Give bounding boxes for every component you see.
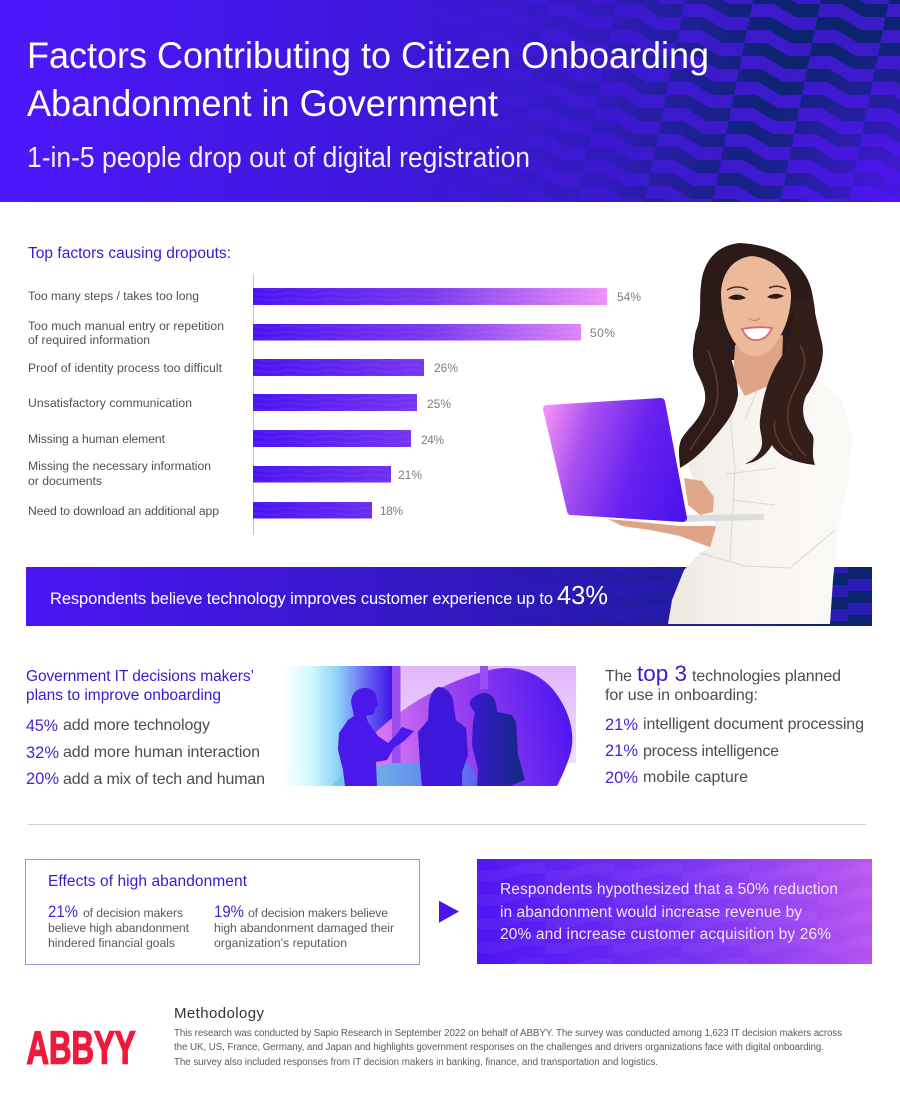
heading: Effects of high abandonment: [48, 873, 248, 890]
face: [721, 256, 791, 356]
hair back: [695, 243, 815, 360]
hair left strand: [679, 318, 738, 468]
title: [27, 34, 709, 124]
heading: technologies planned: [692, 668, 841, 685]
laptop base: [684, 514, 764, 522]
bar: unsatisfactory communication: 25%: [427, 397, 451, 411]
methodology: Methodology: [174, 1005, 264, 1022]
heading: top 3: [637, 661, 687, 686]
man silhouette: [338, 688, 414, 786]
heading: for use in onboarding:: [605, 687, 758, 704]
panel: effects of high abandonment: [26, 860, 420, 964]
subtitle: 1-in-5 people drop out of digital registration: [27, 142, 530, 174]
stat: financial goals: [48, 902, 190, 950]
methodology: This research was conducted by Sapio Research in September 2022 on behalf of ABBYY. The survey was conducted among 1,623 IT decision makers across: [174, 1028, 842, 1039]
bar: manual entry: 50%: [590, 326, 615, 340]
bar: too many steps: Too many steps / takes too long: [28, 289, 199, 303]
callout: hypothesized revenue increase: in abandonment would increase revenue by: [500, 904, 802, 921]
callout banner: technology improves customer experience: [26, 567, 872, 626]
stat: add more technology: 45%: [26, 716, 58, 735]
typing hand: [684, 478, 714, 515]
bar: manual entry: of required information: [28, 333, 150, 347]
bar: too many steps: [28, 288, 641, 305]
hair right strand: [745, 298, 823, 465]
stat: add a mix: 20%: [26, 769, 59, 788]
stat: financial goals: of decision makers: [83, 906, 183, 920]
bar: proof of identity: [28, 359, 458, 376]
methodology: The survey also included responses from IT decision makers in banking, finance, and transportation and logistics.: [174, 1057, 658, 1068]
methodology: [174, 1005, 842, 1068]
bar: human element: 24%: [421, 433, 444, 447]
pillars: [392, 666, 488, 763]
stat: intelligent document processing: intelligent document processing: [643, 716, 864, 733]
floor: [332, 762, 482, 786]
stat: add more human interaction: add more human interaction: [63, 744, 260, 761]
stat: add more technology: add more technology: [63, 717, 210, 734]
callout banner: technology improves customer experience: 43%: [557, 580, 608, 610]
title: Factors Contributing to Citizen Onboarding: [27, 34, 709, 76]
callout: hypothesized revenue increase: Respondents hypothesized that a 50% reduction: [500, 881, 838, 898]
purple blob: [370, 668, 572, 786]
callout banner: technology improves customer experience: Respondents believe technology improves customer experience up to: [50, 590, 553, 608]
stat: process intelligence: 21%: [605, 741, 638, 760]
stat: mobile capture: [605, 768, 748, 787]
bar: missing information: Missing the necessary information: [28, 459, 211, 473]
bar: additional app: [28, 502, 403, 518]
stat: reputation: organization's reputation: [214, 936, 347, 950]
heading: [26, 668, 254, 704]
chart heading: Top factors causing dropouts:: [28, 245, 231, 262]
bar: missing information: or documents: [28, 474, 102, 488]
callout: hypothesized revenue increase: [477, 859, 872, 964]
stat: reputation: [214, 902, 394, 950]
third person silhouette: [470, 693, 525, 786]
stat: financial goals: believe high abandonment: [48, 921, 190, 935]
stat: reputation: 19%: [214, 902, 244, 921]
heading: The: [605, 668, 632, 685]
heading: Government IT decisions makers’: [26, 668, 254, 685]
bar: unsatisfactory communication: [28, 394, 451, 411]
stat: mobile capture: mobile capture: [643, 769, 748, 786]
bar: proof of identity: Proof of identity process too difficult: [28, 361, 223, 375]
bar: manual entry: [28, 319, 615, 347]
bar: human element: Missing a human element: [28, 432, 166, 446]
bar: too many steps: 54%: [617, 290, 641, 304]
methodology: the UK, US, France, Germany, and Japan and highlights government responses on the challenges and drivers organizations face with digital onboarding.: [174, 1042, 824, 1053]
bar: proof of identity: 26%: [434, 361, 458, 375]
stat: add more human interaction: 32%: [26, 743, 59, 762]
stat: mobile capture: 20%: [605, 768, 638, 787]
bar: missing information: [28, 459, 422, 488]
heading: [605, 661, 841, 704]
callout: hypothesized revenue increase: 20% and increase customer acquisition by 26%: [500, 926, 831, 943]
stat: process intelligence: process intelligence: [643, 743, 779, 760]
logo: ABBYY: ABBYY: [26, 1022, 136, 1074]
laptop lid: [547, 402, 683, 518]
arrow: [439, 901, 459, 923]
bar: additional app: Need to download an additional app: [28, 504, 219, 518]
panel: top 3 technologies: [605, 661, 864, 787]
hair curls: [690, 345, 806, 456]
neck: [733, 335, 783, 396]
stat: financial goals: hindered financial goals: [48, 936, 175, 950]
stat: reputation: of decision makers believe: [248, 906, 388, 920]
bar: additional app: 18%: [380, 504, 403, 518]
bar: manual entry: Too much manual entry or repetition: [28, 319, 224, 333]
smile: [742, 327, 772, 340]
stat: reputation: high abandonment damaged their: [214, 921, 394, 935]
bar chart: top factors causing dropouts: [28, 275, 641, 535]
eyes: [728, 294, 784, 300]
stat: intelligent document processing: 21%: [605, 715, 638, 734]
stat: financial goals: 21%: [48, 902, 78, 921]
header banner: [0, 0, 900, 202]
holding forearm: [608, 519, 716, 548]
bar: human element: [28, 430, 444, 447]
stat: add a mix: add a mix of tech and human: [63, 771, 265, 788]
bar: missing information: 21%: [398, 468, 422, 482]
bar: unsatisfactory communication: Unsatisfactory communication: [28, 396, 192, 410]
shirt: [668, 362, 852, 624]
title: Abandonment in Government: [27, 82, 499, 124]
stat: process intelligence: [605, 741, 779, 760]
woman silhouette: [418, 687, 468, 786]
illustration: silhouetted colleagues: [283, 666, 576, 786]
panel: government IT plans: [26, 668, 265, 788]
photo: woman holding laptop: [547, 243, 852, 624]
heading: plans to improve onboarding: [26, 687, 221, 704]
